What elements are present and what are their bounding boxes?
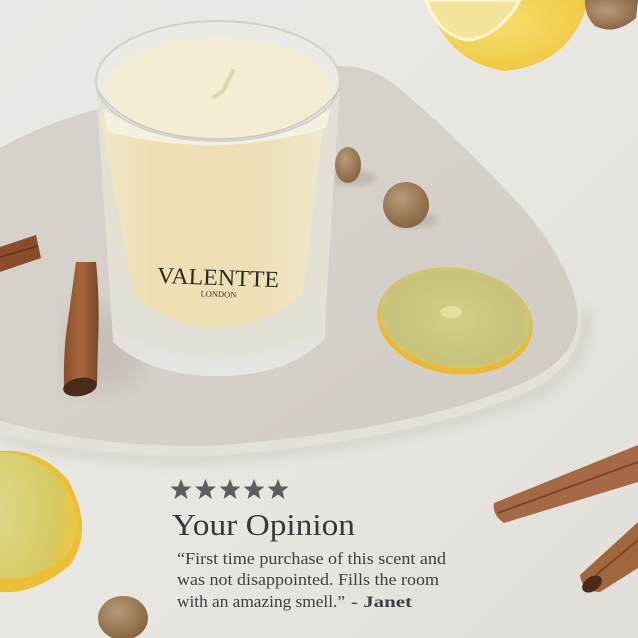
cinnamon sticks right [494,445,638,523]
wax top [106,38,332,138]
cinnamon stick: left edge [0,235,41,272]
frosted glass base [111,300,326,376]
candle shadow on tray [65,305,145,395]
brand label: VALENTTE [157,263,279,292]
wick [214,71,233,97]
testimonial: was not disappointed. Fills the room [177,570,439,589]
cinnamon stick: on tray [62,262,99,399]
lemon top [426,0,585,71]
testimonial [177,549,447,611]
nutmeg: upper [332,147,376,186]
nutmeg bottom [98,596,148,638]
testimonial: “First time purchase of this scent and [177,549,447,568]
brand label: LONDON [200,288,237,300]
glass rim front [97,90,339,139]
candle jar [96,21,340,376]
nutmeg: lower [383,182,438,228]
dried lemon slice on tray [370,258,540,384]
glass rim back [96,21,340,141]
lemon slice bottom left [0,451,82,592]
testimonial: - Janet [351,594,413,611]
wax band highlight [103,110,330,145]
tray [0,66,581,456]
star rating [170,479,288,499]
wax body [100,115,325,328]
nutmeg top right [585,0,638,30]
heading: Your Opinion [172,507,356,542]
testimonial: with an amazing smell.” [177,592,345,611]
tray shadow [0,310,585,460]
cinnamon stick bottom right [579,522,638,596]
glass body [96,85,340,358]
